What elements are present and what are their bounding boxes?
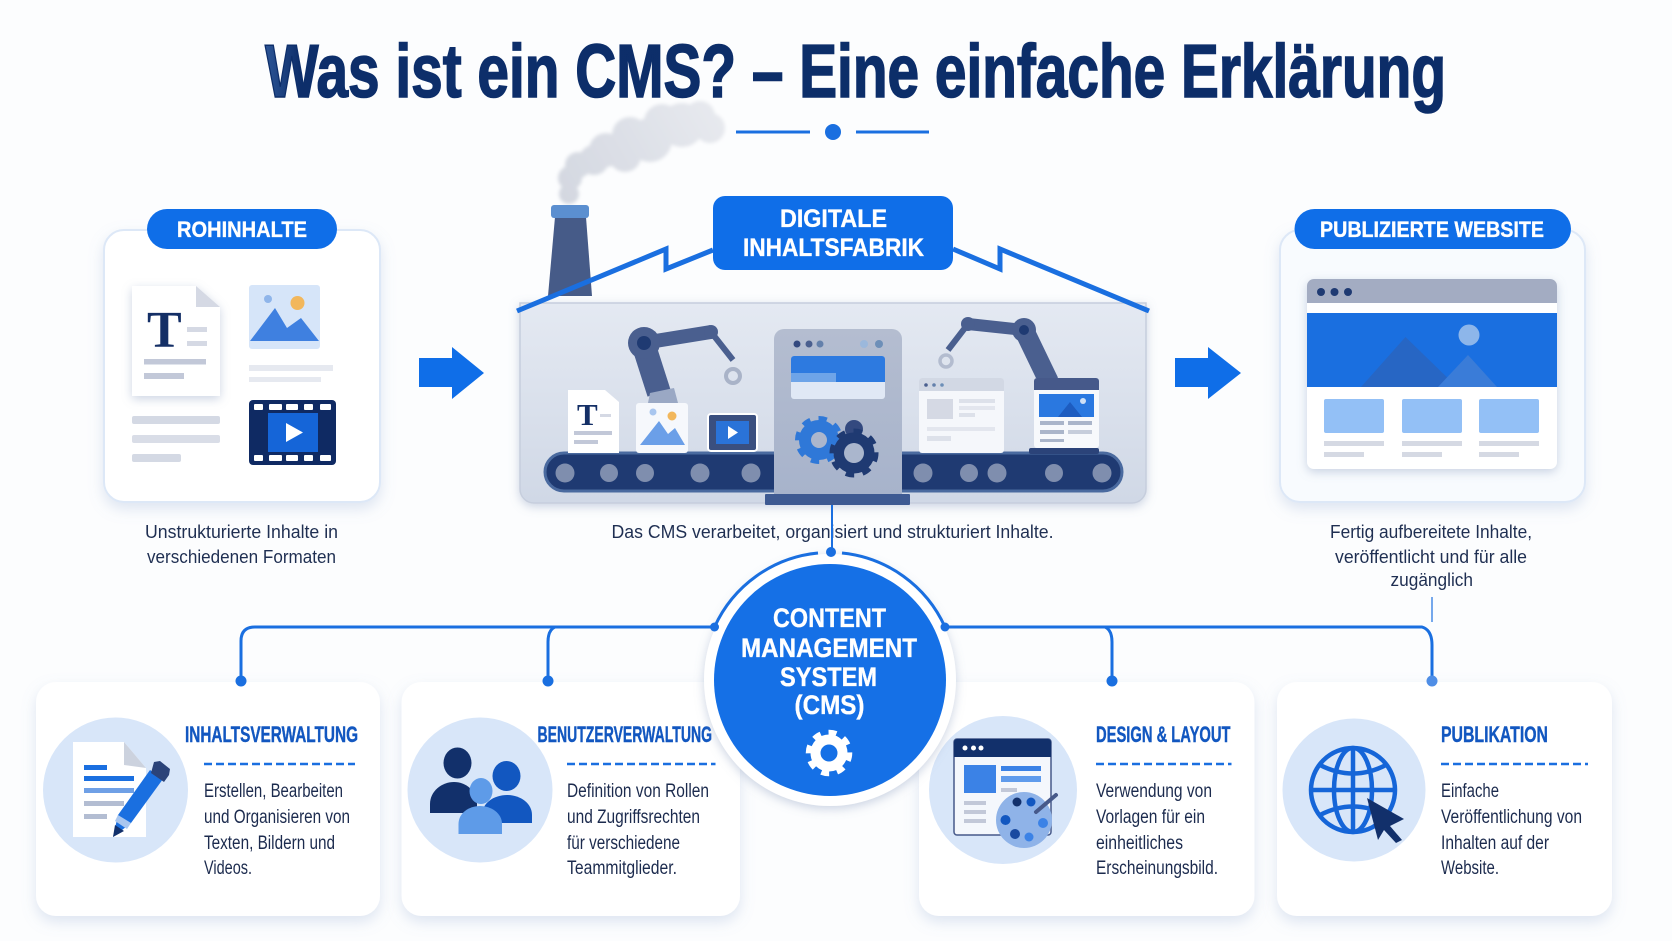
circle label: SYSTEM [780, 662, 877, 692]
small video on belt [708, 414, 757, 451]
icon: text document: T [147, 302, 182, 359]
caption: website: zugänglich [1390, 569, 1473, 590]
description: Veröffentlichung von [1441, 807, 1582, 828]
circle label: CONTENT [773, 603, 886, 633]
description: Verwendung von [1096, 781, 1212, 802]
connector lines [241, 505, 1432, 681]
description [204, 781, 350, 879]
robot arm right [940, 317, 1049, 382]
caption: website [1330, 521, 1532, 590]
pill: Rohinhalte [147, 209, 337, 249]
card: Publikation [1277, 682, 1612, 916]
machine screen [791, 356, 885, 399]
description: einheitliches [1096, 833, 1183, 854]
heading: Inhaltsverwaltung: INHALTSVERWALTUNG [185, 722, 358, 747]
ring arcs [714, 553, 945, 627]
pill: Rohinhalte: ROHINHALTE [177, 217, 307, 242]
small image on belt [636, 403, 688, 453]
robot arm left [628, 325, 740, 403]
central circle: Content Management System [704, 547, 956, 806]
icon: browser and palette [929, 716, 1077, 864]
description: für verschiedene [567, 833, 680, 854]
arrow: factory to website [1175, 347, 1241, 399]
browser window [1307, 279, 1557, 469]
small document on belt: T [577, 397, 598, 432]
card: Benutzerverwaltung [402, 682, 740, 916]
heading: Benutzerverwaltung: BENUTZERVERWALTUNG [538, 722, 712, 747]
icon: text document [132, 286, 220, 396]
arrow: raw content to factory [419, 347, 484, 399]
label: Digitale Inhaltsfabrik: DIGITALE [780, 205, 887, 233]
description [1441, 781, 1582, 879]
connector end dots [236, 676, 1438, 686]
palette [996, 792, 1056, 848]
description: Videos. [204, 858, 252, 879]
panel: Rohinhalte [104, 209, 380, 502]
conveyor belt [545, 453, 1122, 491]
description: Erstellen, Bearbeiten [204, 781, 343, 802]
gears [798, 418, 876, 475]
CMS machine [765, 329, 910, 505]
small document on belt [568, 390, 619, 453]
description: Teammitglieder. [567, 858, 677, 879]
caption: Rohinhalte [145, 521, 338, 567]
description [1096, 781, 1218, 879]
panel: Publizierte Website [1280, 209, 1585, 502]
description: und Zugriffsrechten [567, 807, 700, 828]
icon: image [249, 285, 320, 349]
pill: Publizierte Website: PUBLIZIERTE WEBSITE [1320, 217, 1544, 242]
heading: Design und Layout: DESIGN & LAYOUT [1096, 722, 1231, 747]
icon: users [408, 718, 552, 862]
hero image [1307, 313, 1557, 387]
label: Digitale Inhaltsfabrik: INHALTSFABRIK [743, 234, 924, 262]
caption: website: Fertig aufbereitete Inhalte, [1330, 521, 1532, 542]
description: Website. [1441, 858, 1499, 879]
caption: Rohinhalte: Unstrukturierte Inhalte in [145, 521, 338, 542]
card: Inhaltsverwaltung [36, 682, 380, 916]
factory building [517, 249, 1149, 505]
title ornament [736, 124, 929, 140]
icon: globe and cursor [1282, 718, 1426, 862]
label: Digitale Inhaltsfabrik [713, 196, 953, 270]
text placeholder lines [132, 365, 333, 462]
pill: Publizierte Website [1294, 209, 1571, 249]
circle label [741, 603, 917, 720]
caption: factory: Das CMS verarbeitet, organisiert und strukturiert Inhalte. [612, 521, 1054, 542]
card: Design und Layout [919, 682, 1254, 916]
description: Vorlagen für ein [1096, 807, 1205, 828]
factory chimney [548, 205, 592, 296]
description [567, 781, 709, 879]
description: Erscheinungsbild. [1096, 858, 1218, 879]
caption: Rohinhalte: verschiedenen Formaten [147, 546, 336, 567]
description: und Organisieren von [204, 807, 350, 828]
roof lines [517, 249, 1149, 311]
circle label: MANAGEMENT [741, 633, 917, 663]
icon: gear [808, 732, 850, 774]
heading: Publikation: PUBLIKATION [1441, 722, 1548, 747]
icon: document and pencil [43, 718, 188, 862]
content cards [1324, 399, 1539, 457]
icon: video [249, 400, 336, 465]
circle label: (CMS) [794, 690, 864, 720]
description: Texten, Bildern und [204, 833, 335, 854]
smoke [558, 101, 725, 204]
caption: website: veröffentlicht und für alle [1335, 546, 1527, 567]
description: Definition von Rollen [567, 781, 709, 802]
finished page on belt [1029, 378, 1099, 454]
structured page on belt [919, 378, 1004, 453]
description: Einfache [1441, 781, 1499, 802]
description: Inhalten auf der [1441, 833, 1550, 854]
